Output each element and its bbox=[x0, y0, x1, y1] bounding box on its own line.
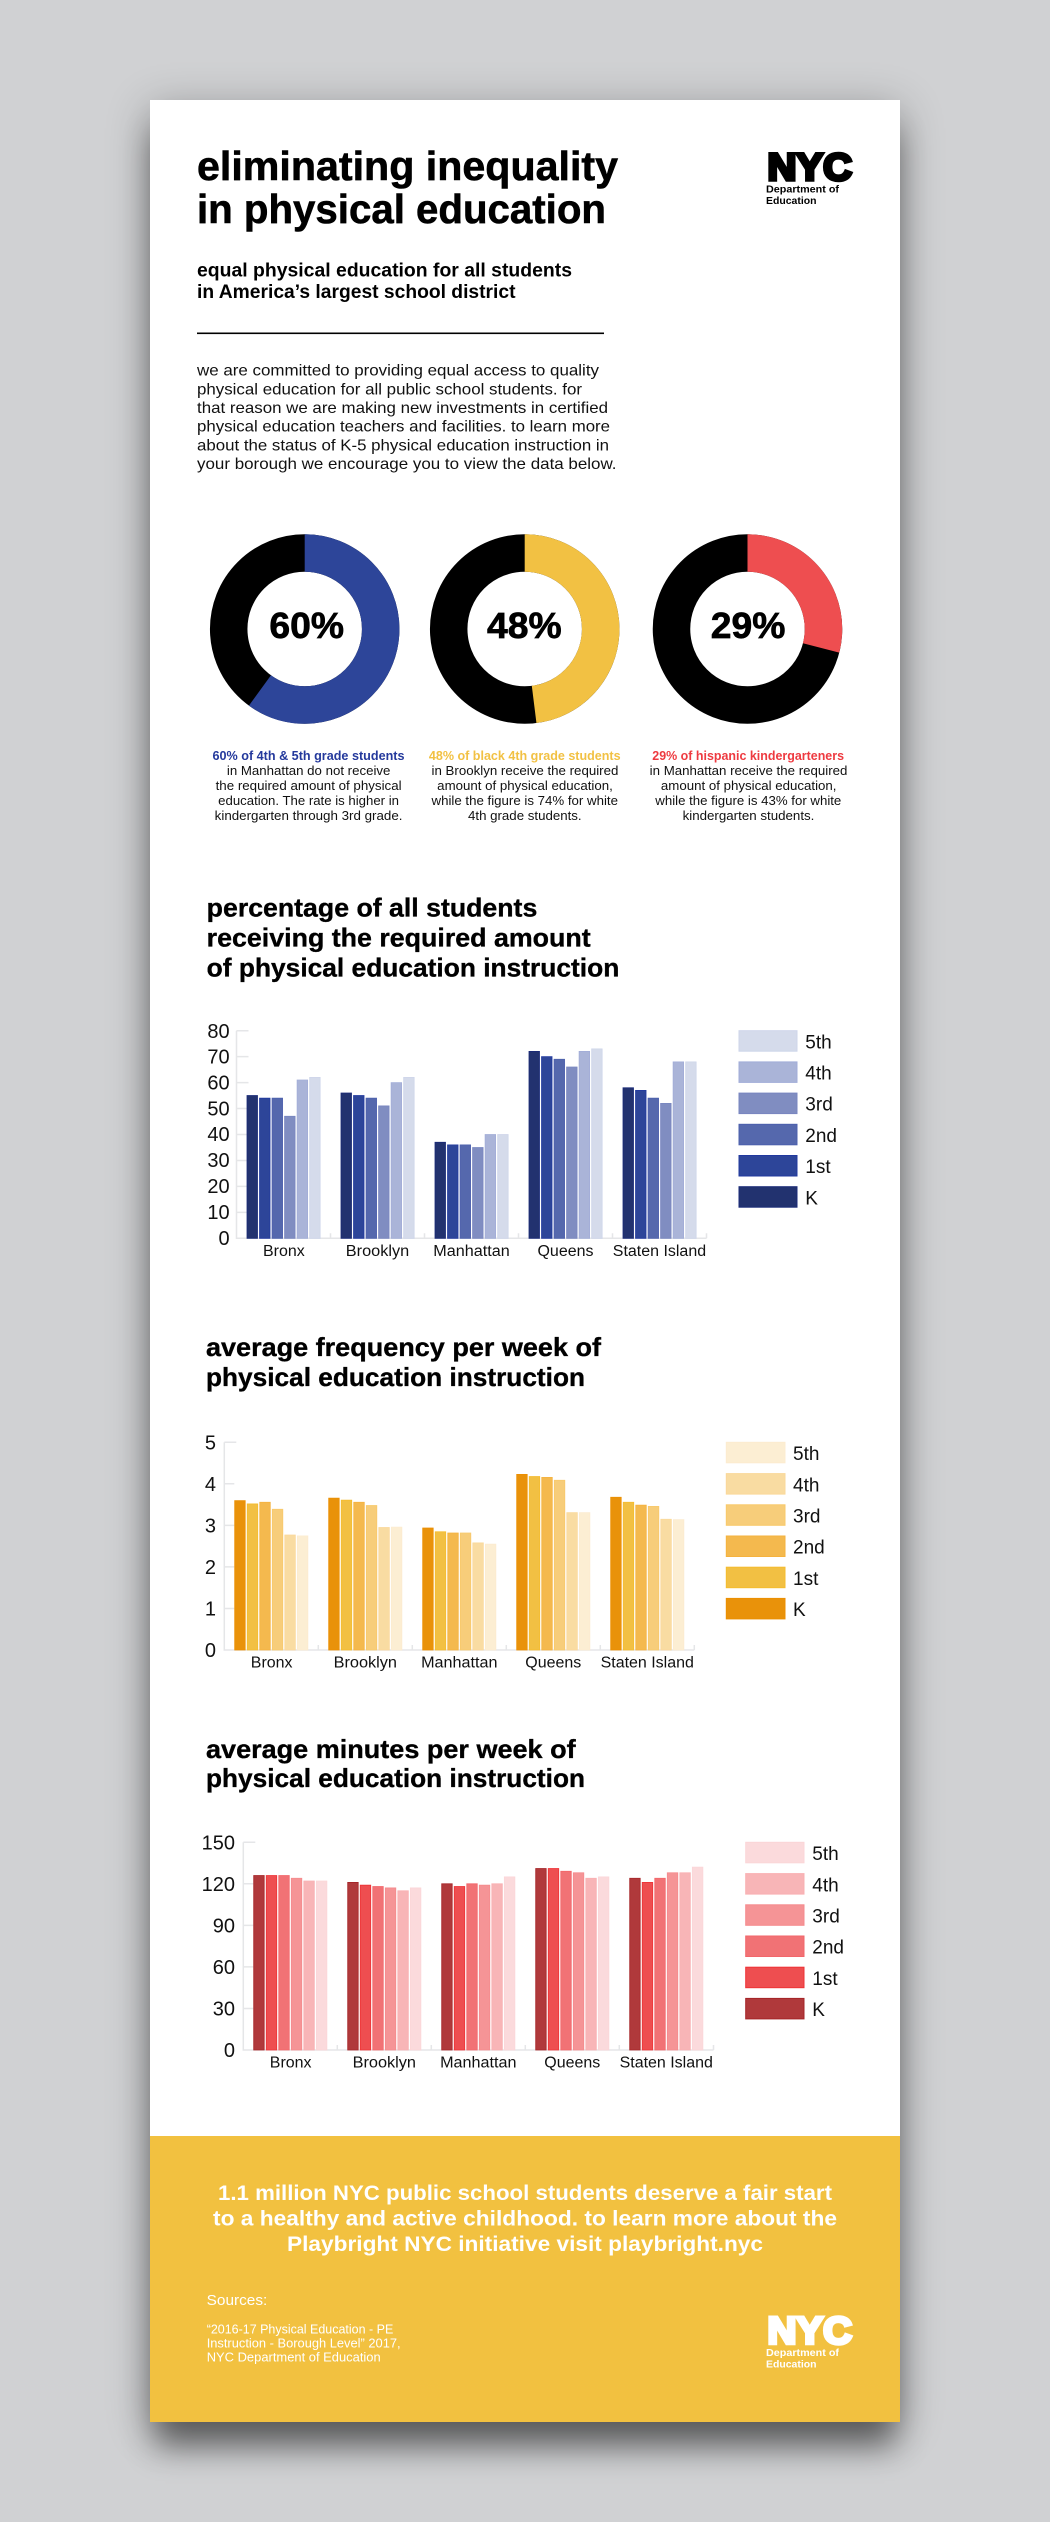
bar chart: percentage of students: 20 bbox=[207, 1176, 230, 1198]
caption: 29%: 29% of hispanic kindergarteners bbox=[652, 748, 844, 763]
bar chart: frequency per week: 0 bbox=[205, 1640, 216, 1662]
legend: frequency chart: 3rd bbox=[793, 1506, 820, 1528]
bar chart: minutes per week: 30 bbox=[213, 1999, 235, 2021]
intro text block: your borough we encourage you to view the data below. bbox=[197, 456, 616, 473]
heading: frequency chart: average frequency per week of bbox=[206, 1332, 601, 1362]
sources: NYC Department of Education bbox=[207, 2350, 381, 2365]
heading: frequency chart: physical education instruction bbox=[206, 1362, 585, 1392]
sources: “2016-17 Physical Education - PE bbox=[207, 2321, 394, 2336]
subtitle: equal physical education for all students bbox=[197, 260, 572, 282]
caption: 48%: amount of physical education, bbox=[437, 778, 613, 793]
bar chart: percentage of students: Queens bbox=[538, 1243, 594, 1260]
bar chart: percentage of students: 40 bbox=[207, 1124, 230, 1146]
sources: Sources: bbox=[207, 2292, 267, 2309]
caption: 48%: 4th grade students. bbox=[468, 808, 582, 823]
bar chart: minutes per week: Bronx bbox=[270, 2055, 312, 2072]
donut: 60% bbox=[229, 553, 381, 705]
legend: frequency chart: K bbox=[793, 1600, 806, 1621]
bar chart: minutes per week: Brooklyn bbox=[353, 2055, 416, 2072]
bar chart: percentage of students: 10 bbox=[207, 1202, 230, 1224]
bar chart: frequency per week: 2 bbox=[205, 1557, 216, 1579]
bar chart: percentage of students: 80 bbox=[207, 1021, 230, 1043]
bars: Brooklyn bbox=[341, 1077, 414, 1238]
logo: white NYC Department of Education: Education bbox=[766, 2359, 816, 2371]
bar chart: minutes per week: 90 bbox=[213, 1916, 235, 1938]
bar chart: minutes per week: Manhattan bbox=[440, 2055, 516, 2072]
bars: Bronx bbox=[247, 1077, 320, 1238]
bar chart: percentage of students: Staten Island bbox=[613, 1243, 706, 1260]
bar chart: percentage of students: Manhattan bbox=[433, 1243, 510, 1260]
bar chart: percentage of students: 70 bbox=[207, 1046, 230, 1068]
caption: 29%: in Manhattan receive the required bbox=[650, 763, 847, 778]
donut: 29% bbox=[672, 553, 824, 705]
bars: Manhattan bbox=[435, 1134, 508, 1238]
bar chart: frequency per week: Bronx bbox=[251, 1655, 293, 1672]
donut: 60%: 60% bbox=[269, 605, 344, 646]
legend: minutes chart: 5th bbox=[812, 1844, 839, 1865]
bar chart: frequency per week: Queens bbox=[525, 1655, 582, 1672]
caption: 29%: amount of physical education, bbox=[661, 778, 836, 793]
caption: 60%: education. The rate is higher in bbox=[218, 793, 399, 808]
donut: 48%: 48% bbox=[487, 605, 562, 646]
bars: Queens bbox=[529, 1049, 602, 1238]
sources bbox=[207, 2292, 401, 2365]
bars: Brooklyn bbox=[348, 1882, 421, 2050]
intro text block: physical education for all public school students. for bbox=[197, 381, 582, 398]
logo: white NYC Department of Education: Department of bbox=[766, 2347, 840, 2359]
bars: Manhattan bbox=[423, 1528, 496, 1650]
intro text block: we are committed to providing equal access to quality bbox=[196, 363, 599, 380]
donut: 48% bbox=[449, 553, 601, 705]
subtitle: in America’s largest school district bbox=[197, 282, 516, 303]
sources: Instruction - Borough Level” 2017, bbox=[207, 2335, 401, 2350]
legend: minutes chart: 1st bbox=[812, 1969, 838, 1990]
caption: 60% bbox=[212, 748, 404, 823]
caption: 60%: 60% of 4th & 5th grade students bbox=[212, 748, 404, 763]
bar chart: minutes per week: Staten Island bbox=[620, 2055, 713, 2072]
caption: 29% bbox=[650, 748, 847, 823]
bar chart: frequency per week: 5 bbox=[205, 1432, 216, 1454]
logo: white NYC Department of Education: NYC bbox=[768, 2310, 852, 2352]
bar chart: minutes per week: 60 bbox=[213, 1957, 235, 1979]
intro text block: about the status of K-5 physical education instruction in bbox=[197, 437, 609, 454]
bar chart: frequency per week: 4 bbox=[205, 1474, 216, 1496]
title: in physical education bbox=[197, 186, 606, 232]
bar chart: percentage of students: 30 bbox=[207, 1150, 230, 1172]
legend: frequency chart: 1st bbox=[793, 1569, 819, 1590]
caption: 29%: kindergarten students. bbox=[683, 808, 814, 823]
panel: white card bbox=[150, 100, 900, 2422]
bar chart: minutes per week: 150 bbox=[202, 1832, 235, 1854]
call to action text bbox=[213, 2182, 837, 2256]
bars: Staten Island bbox=[630, 1867, 703, 2050]
legend: minutes chart: 2nd bbox=[812, 1938, 844, 1959]
caption: 48%: 48% of black 4th grade students bbox=[429, 748, 621, 763]
legend: minutes chart: 3rd bbox=[812, 1906, 840, 1928]
caption: 60%: kindergarten through 3rd grade. bbox=[215, 808, 402, 823]
logo: NYC Department of Education bbox=[766, 147, 852, 207]
heading: minutes chart: average minutes per week of bbox=[206, 1734, 576, 1764]
logo: NYC Department of Education: NYC bbox=[768, 147, 852, 189]
bars: Staten Island bbox=[623, 1062, 696, 1238]
bar chart: frequency per week bbox=[205, 1432, 694, 1672]
legend: minutes chart bbox=[746, 1842, 844, 2021]
bars: Brooklyn bbox=[329, 1498, 402, 1650]
legend: percentage chart: 1st bbox=[805, 1157, 831, 1178]
bar chart: frequency per week: 3 bbox=[205, 1516, 216, 1538]
bars: Bronx bbox=[254, 1875, 327, 2050]
bar chart: percentage of students: Brooklyn bbox=[346, 1243, 409, 1260]
intro text block bbox=[196, 363, 616, 473]
bar chart: frequency per week: Staten Island bbox=[601, 1655, 694, 1672]
heading: percentage chart: receiving the required amount bbox=[207, 923, 591, 953]
legend: minutes chart: 4th bbox=[812, 1875, 839, 1896]
legend: percentage chart: 5th bbox=[805, 1032, 832, 1053]
legend: frequency chart: 4th bbox=[793, 1475, 819, 1496]
bar chart: minutes per week: 0 bbox=[224, 2040, 235, 2062]
bar chart: frequency per week: Brooklyn bbox=[334, 1655, 397, 1672]
bar chart: percentage of students: 60 bbox=[207, 1072, 230, 1094]
title bbox=[197, 143, 618, 232]
heading: frequency chart bbox=[206, 1332, 601, 1392]
bar chart: percentage of students: 0 bbox=[218, 1228, 230, 1250]
logo: NYC Department of Education: Education bbox=[766, 195, 816, 207]
logo: white NYC Department of Education bbox=[766, 2310, 852, 2371]
bar chart: frequency per week: Manhattan bbox=[421, 1655, 498, 1672]
intro text block: physical education teachers and facilities. to learn more bbox=[197, 419, 610, 436]
bars: Queens bbox=[517, 1474, 590, 1650]
legend: frequency chart bbox=[726, 1442, 825, 1621]
bars: Manhattan bbox=[442, 1877, 515, 2050]
donut: 29%: 29% bbox=[711, 605, 785, 646]
legend: percentage chart: 4th bbox=[805, 1064, 832, 1084]
legend: percentage chart bbox=[739, 1031, 837, 1209]
caption: 48%: in Brooklyn receive the required bbox=[432, 763, 618, 778]
bar chart: percentage of students: Bronx bbox=[263, 1243, 305, 1260]
call to action text: Playbright NYC initiative visit playbright.nyc bbox=[287, 2233, 763, 2256]
legend: percentage chart: K bbox=[805, 1188, 818, 1209]
legend: percentage chart: 2nd bbox=[805, 1126, 837, 1147]
legend: frequency chart: 5th bbox=[793, 1444, 819, 1465]
caption: 60%: the required amount of physical bbox=[216, 778, 402, 793]
legend: frequency chart: 2nd bbox=[793, 1538, 825, 1559]
bar chart: minutes per week bbox=[202, 1832, 714, 2072]
bar chart: minutes per week: 120 bbox=[202, 1874, 235, 1896]
caption: 48%: while the figure is 74% for white bbox=[430, 793, 618, 808]
subtitle bbox=[197, 260, 572, 303]
bars: Staten Island bbox=[611, 1497, 684, 1650]
heading: percentage chart bbox=[207, 893, 619, 983]
bars: Queens bbox=[536, 1869, 609, 2050]
heading: percentage chart: of physical education instruction bbox=[207, 953, 619, 983]
caption: 48% bbox=[429, 748, 621, 823]
intro text block: that reason we are making new investments in certified bbox=[197, 400, 608, 417]
logo: NYC Department of Education: Department of bbox=[766, 184, 840, 196]
panel: yellow footer bbox=[150, 2136, 900, 2422]
legend: minutes chart: K bbox=[812, 2000, 825, 2021]
legend: percentage chart: 3rd bbox=[805, 1095, 833, 1116]
bar chart: frequency per week: 1 bbox=[205, 1599, 216, 1621]
bar chart: percentage of students: 50 bbox=[207, 1098, 230, 1120]
heading: minutes chart bbox=[206, 1734, 585, 1793]
heading: percentage chart: percentage of all students bbox=[207, 893, 537, 923]
title: eliminating inequality bbox=[197, 143, 618, 189]
heading: minutes chart: physical education instruction bbox=[206, 1763, 585, 1793]
call to action text: 1.1 million NYC public school students deserve a fair start bbox=[218, 2182, 832, 2205]
bars: Bronx bbox=[235, 1501, 308, 1650]
caption: 60%: in Manhattan do not receive bbox=[227, 763, 390, 778]
call to action text: to a healthy and active childhood. to learn more about the bbox=[213, 2208, 837, 2231]
caption: 29%: while the figure is 43% for white bbox=[654, 793, 841, 808]
bar chart: percentage of students bbox=[207, 1021, 706, 1260]
bar chart: minutes per week: Queens bbox=[544, 2055, 601, 2072]
